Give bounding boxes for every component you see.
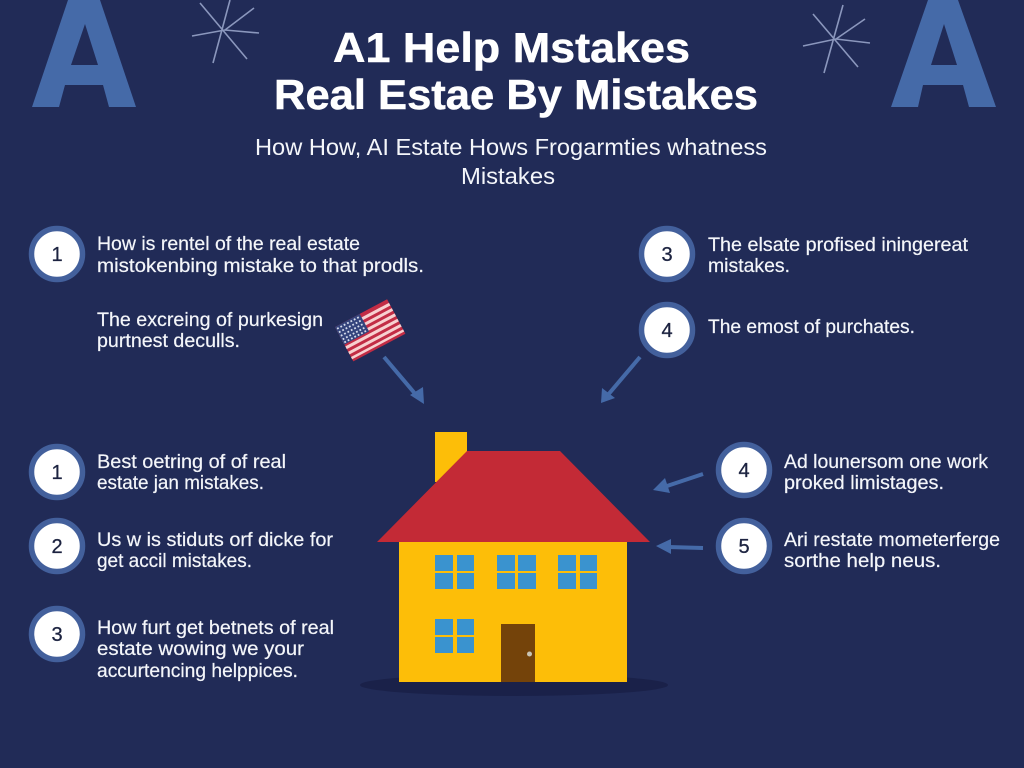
icon: large letter A right: [891, 0, 996, 107]
item: left lower 2: [32, 520, 334, 572]
icon: american flag: [335, 299, 405, 361]
title: A1 Help Mstakes: [333, 24, 690, 71]
subtitle: Mistakes: [461, 163, 555, 189]
item: left lower 2: Us w is stiduts orf dicke for: [97, 529, 334, 551]
item: right lower 4: [718, 444, 988, 496]
item: right top 3: [642, 228, 969, 280]
window lower left: [435, 619, 474, 653]
item: right top 3: 3: [661, 244, 673, 266]
item: left lower 3: How furt get betnets of real: [97, 617, 334, 639]
item: right top 4: [642, 304, 915, 356]
door knob: [527, 652, 532, 656]
window upper middle: [497, 555, 536, 589]
text block: left second paragraph: [97, 309, 323, 352]
item: right top 4: 4: [661, 320, 673, 342]
window upper right: [558, 555, 597, 589]
title: Real Estae By Mistakes: [274, 71, 758, 118]
item: right lower 5: sorthe help neus.: [784, 550, 941, 572]
house ground shadow: [360, 674, 668, 696]
item: right top 3: The elsate profised iningereat: [708, 234, 969, 256]
item: left lower 1: estate jan mistakes.: [97, 472, 264, 494]
arrow: item 4 to house: [653, 474, 703, 493]
window upper left: [435, 555, 474, 589]
text block: left second paragraph: purtnest deculls.: [97, 330, 240, 352]
item: left lower 3: accurtencing helppices.: [97, 660, 298, 682]
chimney: [435, 432, 467, 482]
item: left lower 3: 3: [51, 624, 63, 646]
subtitle: How How, AI Estate Hows Frogarmties whatness: [255, 134, 767, 160]
item: right lower 5: [718, 520, 1000, 572]
item: left top 1: 1: [51, 244, 63, 266]
item: right top 4: The emost of purchates.: [708, 316, 915, 338]
item: left lower 2: get accil mistakes.: [97, 550, 252, 572]
item: left lower 1: [32, 446, 286, 498]
subtitle: [255, 134, 767, 189]
icon: star burst left: [192, 0, 259, 63]
item: right top 3: mistakes.: [708, 255, 790, 277]
item: right lower 4: proked limistages.: [784, 472, 944, 494]
icon: large letter A left: [32, 0, 136, 107]
item: right lower 5: 5: [738, 536, 750, 558]
roof: [377, 451, 650, 542]
item: left top 1: [32, 228, 424, 280]
icon: star burst right: [803, 5, 870, 73]
house illustration: [360, 432, 668, 696]
item: right lower 5: Ari restate mometerferge: [784, 529, 1000, 551]
text block: left second paragraph: The excreing of purkesign: [97, 309, 323, 331]
arrow: item 5 to house: [656, 539, 703, 554]
title: [274, 24, 758, 118]
item: left lower 2: 2: [51, 536, 63, 558]
item: left lower 3: estate wowing we your: [97, 638, 305, 660]
door: [501, 624, 535, 682]
item: right lower 4: Ad lounersom one work: [784, 451, 988, 473]
house body: [399, 542, 627, 682]
item: left lower 1: 1: [51, 462, 63, 484]
arrow: flag to house: [384, 357, 424, 404]
item: left top 1: mistokenbing mistake to that prodls.: [97, 255, 424, 277]
item: left top 1: How is rentel of the real estate: [97, 233, 360, 255]
arrow: item 4 to house: [601, 357, 640, 403]
item: left lower 1: Best oetring of of real: [97, 451, 286, 473]
item: right lower 4: 4: [738, 460, 750, 482]
item: left lower 3: [32, 608, 334, 682]
